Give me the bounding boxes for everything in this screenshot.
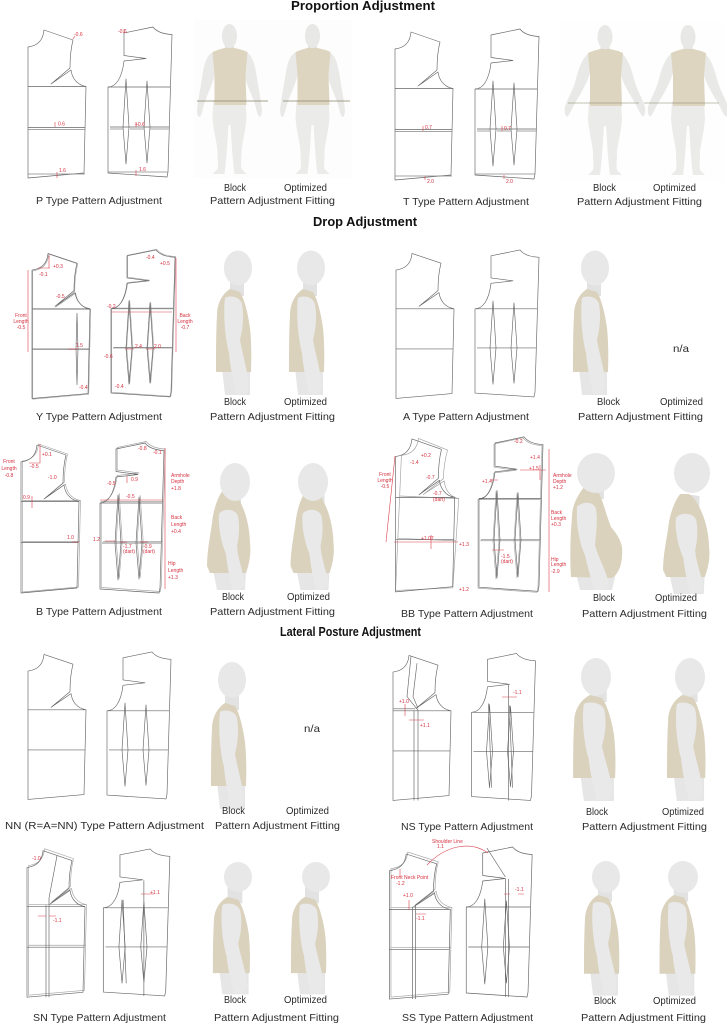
red annotations: -0.1 bbox=[153, 450, 162, 456]
back pattern bbox=[466, 847, 532, 997]
red annotations: 1.6 bbox=[139, 167, 146, 173]
caption: NN (R=A=NN) Type Pattern Adjustment bbox=[5, 820, 204, 832]
red annotations: Length bbox=[177, 319, 193, 325]
red annotations bbox=[1, 444, 190, 589]
red annotations: -0.4 bbox=[115, 384, 124, 390]
front pattern bbox=[393, 655, 451, 800]
red annotations: -0.1 bbox=[39, 272, 48, 278]
front pattern bbox=[395, 32, 453, 180]
label: block: Block bbox=[597, 396, 621, 408]
front pattern bbox=[21, 444, 80, 593]
red annotations: 0.9 bbox=[23, 495, 30, 501]
red annotations: -0.7 bbox=[433, 491, 442, 497]
label: optimized: Optimized bbox=[662, 806, 704, 818]
panel: SS type fitting bbox=[581, 861, 706, 1024]
red annotations: +0.3 bbox=[551, 522, 561, 528]
red annotations: 1.5 bbox=[76, 343, 83, 349]
back pattern bbox=[478, 437, 543, 592]
red annotations: -0.5 bbox=[56, 294, 65, 300]
red annotations bbox=[32, 856, 160, 924]
label: block: Block bbox=[222, 591, 245, 603]
caption: Pattern Adjustment Fitting bbox=[214, 1012, 339, 1024]
panel: SS type pattern adjustment bbox=[389, 839, 533, 1024]
label: optimized: Optimized bbox=[284, 182, 327, 194]
caption: B Type Pattern Adjustment bbox=[36, 606, 162, 618]
red annotations bbox=[391, 839, 524, 922]
red annotations: -1.0 bbox=[48, 475, 57, 481]
red annotations: -0.5 bbox=[107, 481, 116, 487]
figure: optimized side view bbox=[663, 453, 710, 594]
label: block: Block bbox=[222, 805, 246, 817]
figure: block side view bbox=[584, 861, 620, 996]
red annotations: -1.1 bbox=[416, 916, 425, 922]
red annotations: +1.0 bbox=[399, 699, 409, 705]
red annotations: 2.0 bbox=[427, 179, 434, 185]
figure: block side view bbox=[207, 463, 250, 590]
label: optimized: Optimized bbox=[284, 994, 327, 1006]
red annotations: +1.1 bbox=[150, 890, 160, 896]
caption: Pattern Adjustment Fitting bbox=[210, 195, 335, 207]
back pattern bbox=[475, 29, 539, 179]
red annotations: Back bbox=[551, 510, 563, 516]
red annotations: +1.3 bbox=[459, 542, 469, 548]
red annotations: -0.5 bbox=[30, 464, 39, 470]
panel: P type pattern adjustment bbox=[28, 27, 172, 207]
red annotations: Front bbox=[379, 472, 391, 478]
red annotations: +1.5 bbox=[529, 466, 539, 472]
red annotations: -1.0 bbox=[32, 856, 41, 862]
red annotations: -0.9 bbox=[143, 544, 152, 550]
red annotations: Length bbox=[13, 319, 29, 325]
panel: Y type fitting bbox=[210, 250, 335, 423]
red annotations: Depth bbox=[553, 479, 567, 485]
front pattern bbox=[28, 30, 86, 178]
label: optimized: Optimized bbox=[287, 591, 330, 603]
red annotations: +1.2 bbox=[553, 485, 563, 491]
red annotations: 1.6 bbox=[59, 168, 66, 174]
red annotations: 0.6 bbox=[58, 122, 65, 128]
panel: P type fitting bbox=[194, 20, 352, 207]
red annotations: -0.2 bbox=[514, 439, 523, 445]
panel: T type pattern adjustment bbox=[395, 29, 539, 208]
label: optimized: Optimized bbox=[660, 396, 703, 408]
red annotations: -0.5 bbox=[126, 494, 135, 500]
red annotations: -0.7 bbox=[426, 475, 435, 481]
figure: optimized back view bbox=[648, 25, 727, 175]
panel: SN type fitting bbox=[213, 862, 339, 1024]
figure: block side view bbox=[570, 453, 622, 590]
red annotations: -0.4 bbox=[79, 385, 88, 391]
red annotations: +1.4 bbox=[482, 479, 492, 485]
red annotations: -0.8 bbox=[5, 473, 14, 479]
front pattern bbox=[27, 849, 86, 997]
red annotations: Length bbox=[171, 522, 187, 528]
panel: Y type pattern adjustment bbox=[13, 249, 193, 423]
panel: BB type fitting bbox=[570, 453, 710, 620]
panel: A type fitting bbox=[573, 250, 703, 423]
back pattern bbox=[472, 653, 536, 800]
title: Drop Adjustment: Drop Adjustment bbox=[313, 214, 418, 229]
red annotations: -0.6 bbox=[74, 32, 83, 38]
red annotations: -0.5 bbox=[17, 325, 26, 331]
red annotations: 0.9 bbox=[131, 477, 138, 483]
figure: optimized side view bbox=[667, 658, 705, 801]
red annotations: 1.2 bbox=[93, 537, 100, 543]
label: block: Block bbox=[224, 994, 247, 1006]
panel: NS type pattern adjustment bbox=[393, 653, 536, 833]
red annotations: Depth bbox=[171, 479, 185, 485]
figure: block back view bbox=[565, 25, 645, 175]
caption: Pattern Adjustment Fitting bbox=[215, 820, 340, 832]
label: block: Block bbox=[224, 182, 247, 194]
red annotations: Back bbox=[171, 515, 183, 521]
back pattern bbox=[100, 442, 165, 593]
caption: Pattern Adjustment Fitting bbox=[578, 411, 703, 423]
front pattern bbox=[389, 852, 452, 999]
figure: optimized back view bbox=[280, 24, 345, 174]
red annotations: -1.5 bbox=[501, 554, 510, 560]
red annotations: +0.4 bbox=[171, 529, 181, 535]
caption: Pattern Adjustment Fitting bbox=[210, 411, 335, 423]
figure: block side view bbox=[213, 862, 252, 994]
panel: BB type pattern adjustment bbox=[377, 437, 572, 620]
red annotations: Length bbox=[377, 478, 393, 484]
red annotations: Armhole bbox=[553, 473, 572, 479]
red annotations: Hip bbox=[168, 561, 176, 567]
red annotations: (dart) bbox=[143, 549, 155, 555]
front pattern bbox=[32, 253, 91, 399]
figure: optimized side view bbox=[289, 250, 325, 395]
red annotations: Length bbox=[1, 466, 17, 472]
red annotations: Hip bbox=[551, 557, 559, 563]
panel: SN type pattern adjustment bbox=[27, 849, 170, 1024]
red annotations: -0.6 bbox=[118, 29, 127, 35]
red annotations: Front bbox=[3, 459, 15, 465]
figure: block side view bbox=[216, 250, 252, 395]
red annotations: 1.1 bbox=[437, 844, 444, 850]
red annotations: -1.2 bbox=[396, 881, 405, 887]
panel: A type pattern adjustment bbox=[396, 250, 539, 423]
red annotations: +1.3 bbox=[168, 575, 178, 581]
panel: B type pattern adjustment bbox=[1, 442, 190, 618]
title: Lateral Posture Adjustment: Lateral Posture Adjustment bbox=[280, 624, 422, 639]
red annotations: -2.9 bbox=[551, 569, 560, 575]
caption: Pattern Adjustment Fitting bbox=[581, 1012, 706, 1024]
figure: optimized side view bbox=[291, 862, 330, 994]
red annotations: -1.7 bbox=[123, 544, 132, 550]
note: n/a: n/a bbox=[304, 723, 320, 735]
red annotations: +1.07 bbox=[421, 536, 434, 542]
red annotations: 1.0 bbox=[67, 535, 74, 541]
red annotations: +1.0 bbox=[403, 893, 413, 899]
label: block: Block bbox=[593, 592, 616, 604]
red annotations: +1.2 bbox=[459, 587, 469, 593]
red annotations: Front Neck Point bbox=[391, 875, 429, 881]
label: block: Block bbox=[594, 995, 617, 1007]
red annotations: Length bbox=[551, 562, 567, 568]
red annotations: Shoulder Line bbox=[432, 839, 463, 845]
back pattern bbox=[107, 652, 171, 799]
red annotations bbox=[377, 439, 572, 593]
caption: Pattern Adjustment Fitting bbox=[582, 608, 707, 620]
figure: block side view bbox=[211, 662, 246, 809]
caption: SN Type Pattern Adjustment bbox=[33, 1012, 166, 1024]
label: block: Block bbox=[586, 806, 609, 818]
red annotations: +1.1 bbox=[420, 723, 430, 729]
label: optimized: Optimized bbox=[655, 592, 697, 604]
caption: Pattern Adjustment Fitting bbox=[582, 821, 707, 833]
red annotations: (dart) bbox=[123, 549, 135, 555]
panel: NS type fitting bbox=[573, 658, 707, 833]
red annotations: -0.8 bbox=[138, 446, 147, 452]
red annotations: Length bbox=[168, 568, 184, 574]
figure: block back view bbox=[197, 24, 262, 174]
red annotations: (dart) bbox=[501, 559, 513, 565]
red annotations: 2.0 bbox=[154, 344, 161, 350]
red annotations: Armhole bbox=[171, 473, 190, 479]
red annotations: Front bbox=[15, 313, 27, 319]
caption: T Type Pattern Adjustment bbox=[403, 196, 529, 208]
figure: block side view bbox=[573, 658, 615, 801]
figure: block side view bbox=[573, 250, 609, 395]
red annotations: +1.8 bbox=[171, 486, 181, 492]
red annotations: +0.3 bbox=[53, 264, 63, 270]
red annotations: 2.0 bbox=[506, 179, 513, 185]
red annotations: 0.7 bbox=[425, 125, 432, 131]
caption: A Type Pattern Adjustment bbox=[403, 411, 529, 423]
panel: T type fitting bbox=[560, 22, 727, 208]
red annotations: +1.4 bbox=[530, 455, 540, 461]
front pattern bbox=[396, 253, 454, 398]
figure: optimized side view bbox=[290, 463, 334, 590]
red annotations: +0.2 bbox=[421, 453, 431, 459]
red annotations bbox=[423, 125, 513, 185]
red annotations: -0.4 bbox=[146, 255, 155, 261]
red annotations: Back bbox=[179, 313, 191, 319]
caption: Pattern Adjustment Fitting bbox=[577, 196, 702, 208]
label: block: Block bbox=[224, 396, 247, 408]
back pattern bbox=[475, 250, 539, 397]
label: optimized: Optimized bbox=[286, 805, 329, 817]
red annotations bbox=[55, 29, 146, 178]
back pattern bbox=[111, 249, 176, 397]
red annotations: (dart) bbox=[433, 497, 445, 503]
label: optimized: Optimized bbox=[653, 182, 696, 194]
red annotations: -0.2 bbox=[107, 304, 116, 310]
red annotations: -1.1 bbox=[515, 887, 524, 893]
red annotations: -0.7 bbox=[181, 325, 190, 331]
panel: NN type fitting bbox=[211, 662, 340, 832]
label: optimized: Optimized bbox=[653, 995, 696, 1007]
note: n/a: n/a bbox=[673, 343, 689, 355]
red annotations: +0.1 bbox=[42, 452, 52, 458]
caption: P Type Pattern Adjustment bbox=[36, 195, 162, 207]
panel: NN type pattern adjustment bbox=[5, 652, 204, 832]
back pattern bbox=[103, 849, 170, 996]
label: optimized: Optimized bbox=[284, 396, 327, 408]
back pattern bbox=[108, 27, 172, 177]
caption: Pattern Adjustment Fitting bbox=[210, 606, 335, 618]
front pattern bbox=[28, 654, 86, 799]
red annotations: -1.4 bbox=[410, 460, 419, 466]
caption: NS Type Pattern Adjustment bbox=[401, 821, 533, 833]
red annotations bbox=[399, 690, 522, 729]
red annotations: +0.5 bbox=[160, 261, 170, 267]
red annotations: Length bbox=[551, 516, 567, 522]
red annotations: 0.7 bbox=[504, 126, 511, 132]
red annotations: 2.4 bbox=[135, 344, 142, 350]
panel: B type fitting bbox=[207, 463, 335, 618]
red annotations bbox=[13, 255, 193, 391]
caption: SS Type Pattern Adjustment bbox=[402, 1012, 533, 1024]
front pattern bbox=[396, 438, 461, 593]
red annotations: +0.6 bbox=[135, 122, 145, 128]
figure: optimized side view bbox=[660, 861, 698, 996]
red annotations: -1.1 bbox=[53, 918, 62, 924]
caption: BB Type Pattern Adjustment bbox=[401, 608, 533, 620]
red annotations: -0.5 bbox=[381, 484, 390, 490]
label: block: Block bbox=[593, 182, 617, 194]
caption: Y Type Pattern Adjustment bbox=[36, 411, 162, 423]
red annotations: -0.6 bbox=[104, 354, 113, 360]
red annotations: -1.1 bbox=[513, 690, 522, 696]
